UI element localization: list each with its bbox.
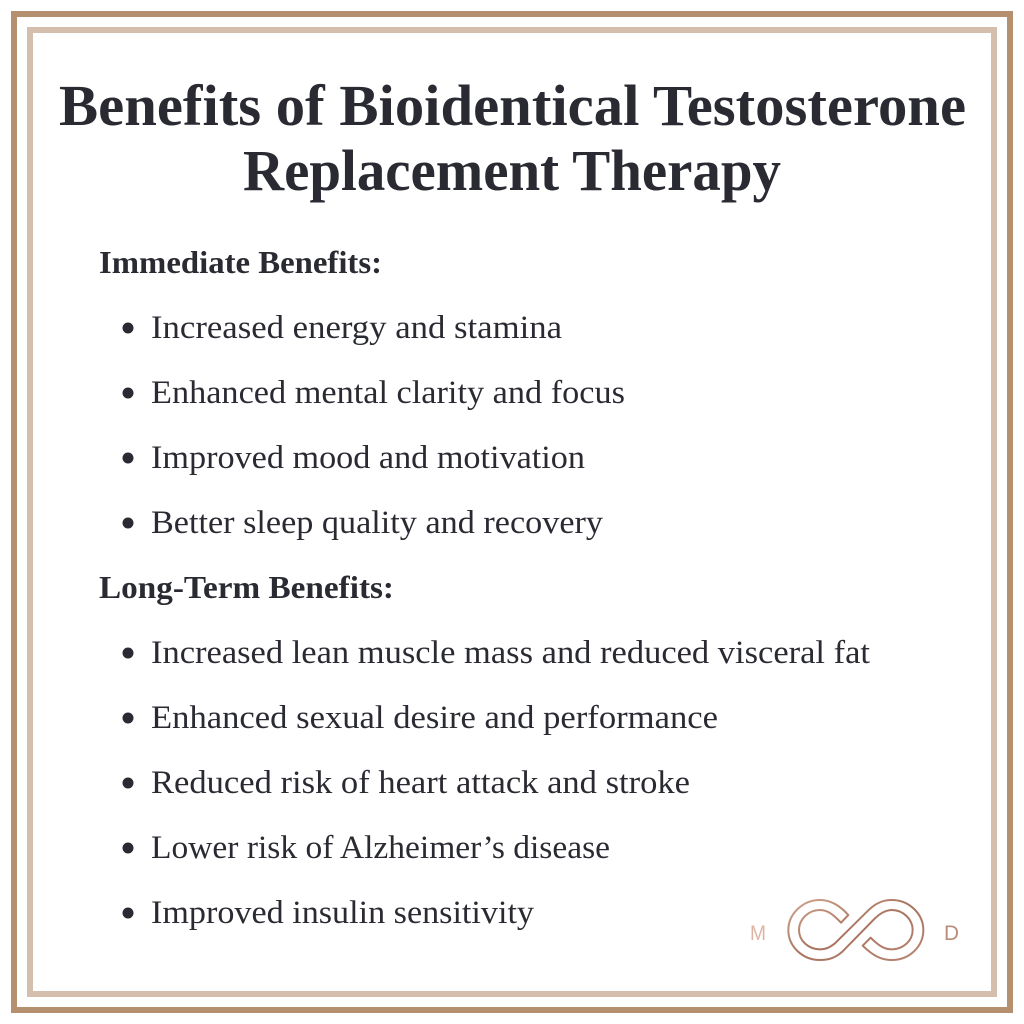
- list: immediate benefits: Improved mood and motivation: [151, 440, 585, 476]
- logo letter M: M: [750, 922, 766, 945]
- list: long-term benefits: Increased lean muscle mass and reduced visceral fat: [151, 635, 870, 671]
- title: [59, 73, 966, 203]
- logo: infinity MD: [750, 900, 959, 960]
- heading: immediate benefits: Immediate Benefits:: [99, 244, 382, 280]
- list: long-term benefits: Improved insulin sensitivity: [151, 895, 535, 931]
- list: immediate benefits: Increased energy and stamina: [151, 310, 562, 346]
- title: Replacement Therapy: [243, 138, 781, 203]
- list: long-term benefits: Enhanced sexual desire and performance: [151, 700, 718, 736]
- heading: long-term benefits: Long-Term Benefits:: [99, 569, 394, 605]
- list: long-term benefits: Reduced risk of heart attack and stroke: [151, 765, 690, 801]
- logo letter D: D: [944, 922, 959, 945]
- list: immediate benefits: Enhanced mental clarity and focus: [151, 375, 625, 411]
- list: long-term benefits: Lower risk of Alzheimer’s disease: [151, 830, 610, 866]
- list: long-term benefits: [122, 635, 870, 931]
- title: Benefits of Bioidentical Testosterone: [59, 73, 966, 138]
- list: immediate benefits: Better sleep quality and recovery: [151, 505, 604, 541]
- list: immediate benefits: [122, 310, 625, 541]
- icon: infinity symbol: [788, 900, 923, 960]
